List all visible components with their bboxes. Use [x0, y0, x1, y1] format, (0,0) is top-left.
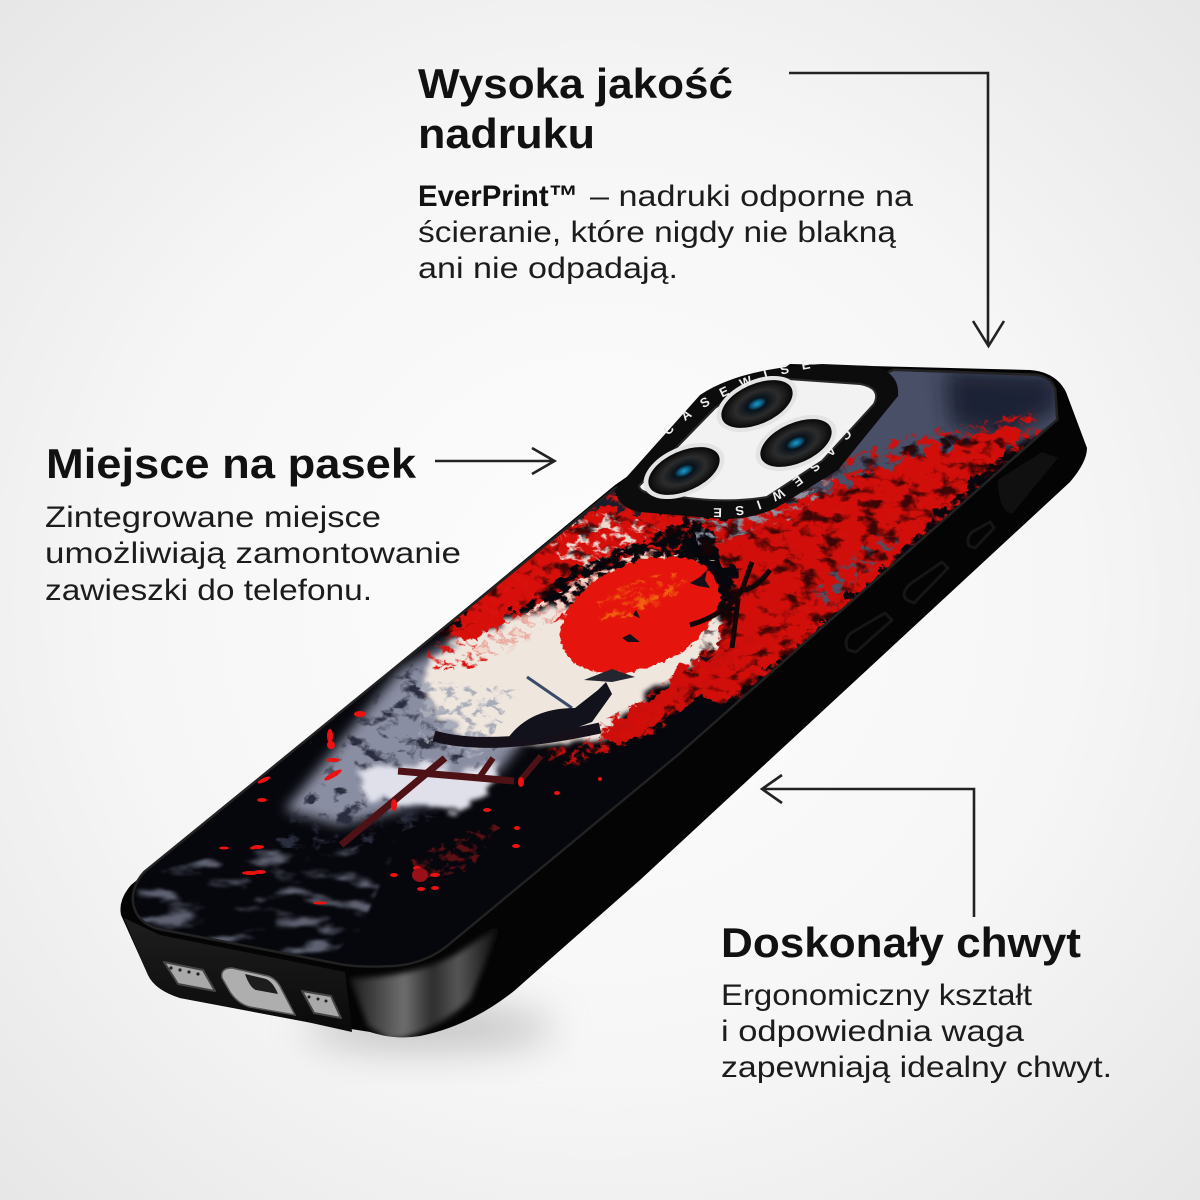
body text: i odpowiednia waga	[721, 1015, 1024, 1048]
body text: zawieszki do telefonu.	[45, 574, 372, 607]
usb port	[222, 968, 295, 1015]
body text	[45, 501, 461, 607]
torii gate	[341, 728, 600, 845]
red fringe of ground	[542, 632, 736, 768]
body text	[721, 979, 1112, 1084]
body text: – nadruki odporne na	[590, 180, 913, 213]
camera module	[615, 360, 898, 519]
body text	[418, 180, 913, 285]
red sun	[560, 556, 722, 674]
body text: ścieranie, które nigdy nie blakną	[418, 216, 896, 249]
samurai	[508, 669, 635, 742]
callout: grip	[721, 919, 1112, 1084]
heading: nadruku	[418, 110, 595, 157]
slate sky	[784, 371, 1056, 505]
red foliage top left	[445, 510, 690, 640]
lower dark ground	[624, 694, 725, 756]
bezel	[134, 371, 1056, 965]
heading: Wysoka jakość	[418, 60, 733, 107]
ring lettering: CASEWISE	[664, 360, 810, 434]
lens right	[747, 404, 845, 482]
callout: strap mount	[45, 440, 461, 607]
ground ember dust	[410, 825, 500, 880]
red petals	[219, 711, 602, 904]
art base	[134, 430, 1044, 962]
heading: Doskonały chwyt	[721, 919, 1081, 966]
foliage shadows	[438, 424, 1030, 722]
bottom face	[124, 918, 352, 1032]
lens left	[635, 432, 733, 510]
bottom clouds	[136, 846, 392, 955]
ring lettering	[664, 360, 851, 518]
red foliage right	[600, 425, 1020, 755]
speaker left	[164, 962, 215, 991]
arrow: print quality	[789, 73, 1004, 346]
arrow: grip	[762, 775, 974, 917]
foliage grey breaks	[688, 476, 836, 546]
tree	[690, 562, 770, 648]
phone case	[120, 364, 1087, 1040]
glossy corner	[350, 925, 500, 1040]
speaker right	[302, 991, 341, 1018]
heading: Miejsce na pasek	[46, 440, 417, 487]
arrow: strap mount	[435, 448, 554, 474]
white glow	[425, 600, 740, 745]
camera island	[615, 364, 898, 519]
phone artwork: samurai and red sun	[134, 371, 1056, 966]
side buttons	[846, 522, 994, 652]
camera cutout	[639, 379, 876, 500]
phone shadow	[305, 1006, 555, 1050]
grey clouds	[285, 630, 560, 825]
bats	[622, 570, 716, 662]
case body	[120, 364, 1087, 1037]
body text: zapewniają idealny chwyt.	[721, 1051, 1112, 1084]
body text: umożliwiają zamontowanie	[45, 537, 461, 570]
body text: Ergonomiczny kształt	[721, 979, 1033, 1012]
heading	[418, 60, 733, 157]
grey wash in glow	[420, 680, 520, 760]
peach glow above sun	[470, 550, 720, 660]
body text: Zintegrowane miejsce	[45, 501, 381, 534]
ring lettering: CASEWISE	[714, 431, 851, 518]
lens top	[708, 365, 806, 443]
body text: ani nie odpadają.	[418, 252, 678, 285]
callout: print quality	[418, 60, 913, 285]
body text: EverPrint™	[418, 180, 578, 213]
strap slot	[998, 452, 1058, 514]
left upper dark sky	[574, 490, 641, 526]
